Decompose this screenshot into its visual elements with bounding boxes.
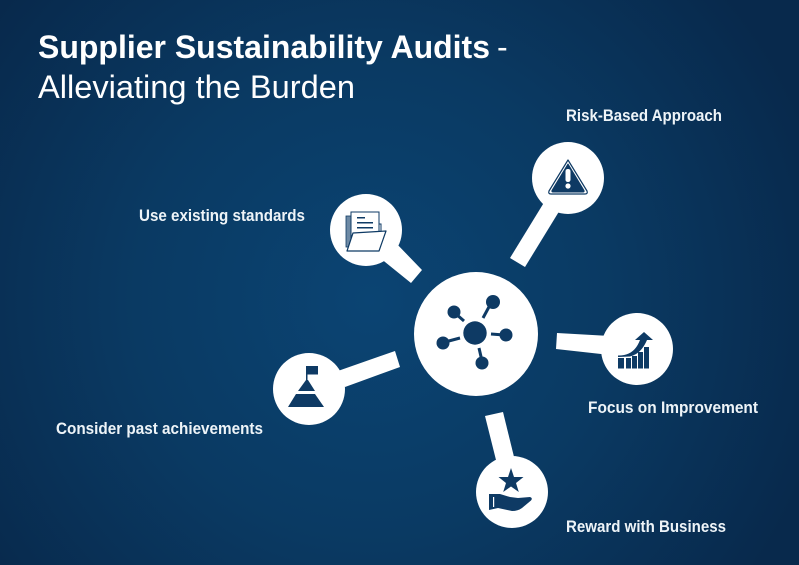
title: [38, 29, 508, 105]
node: reward with business: [476, 412, 548, 528]
label: focus on improvement: Focus on Improvement: [588, 399, 758, 417]
title: Supplier Sustainability Audits: [38, 29, 490, 65]
node: risk-based approach: [510, 142, 604, 267]
icon: network nodes: [436, 295, 512, 370]
icon: hand holding star: [489, 468, 532, 511]
icon: folder with documents: [346, 212, 386, 251]
node: focus on improvement: [556, 313, 673, 385]
label: consider past achievements: Consider past achievements: [56, 420, 263, 438]
hub: central circle: [414, 272, 538, 396]
title: Alleviating the Burden: [38, 69, 355, 105]
icon: growth chart with arrow: [618, 332, 653, 368]
label: reward with business: Reward with Business: [566, 518, 726, 536]
label: risk-based approach: Risk-Based Approach: [566, 107, 722, 125]
node: use existing standards: [330, 194, 422, 283]
node: consider past achievements: [273, 351, 400, 425]
label: use existing standards: Use existing standards: [139, 207, 305, 225]
title: -: [497, 29, 508, 65]
icon: flag on mountain: [288, 366, 324, 407]
icon: warning triangle: [549, 160, 587, 194]
